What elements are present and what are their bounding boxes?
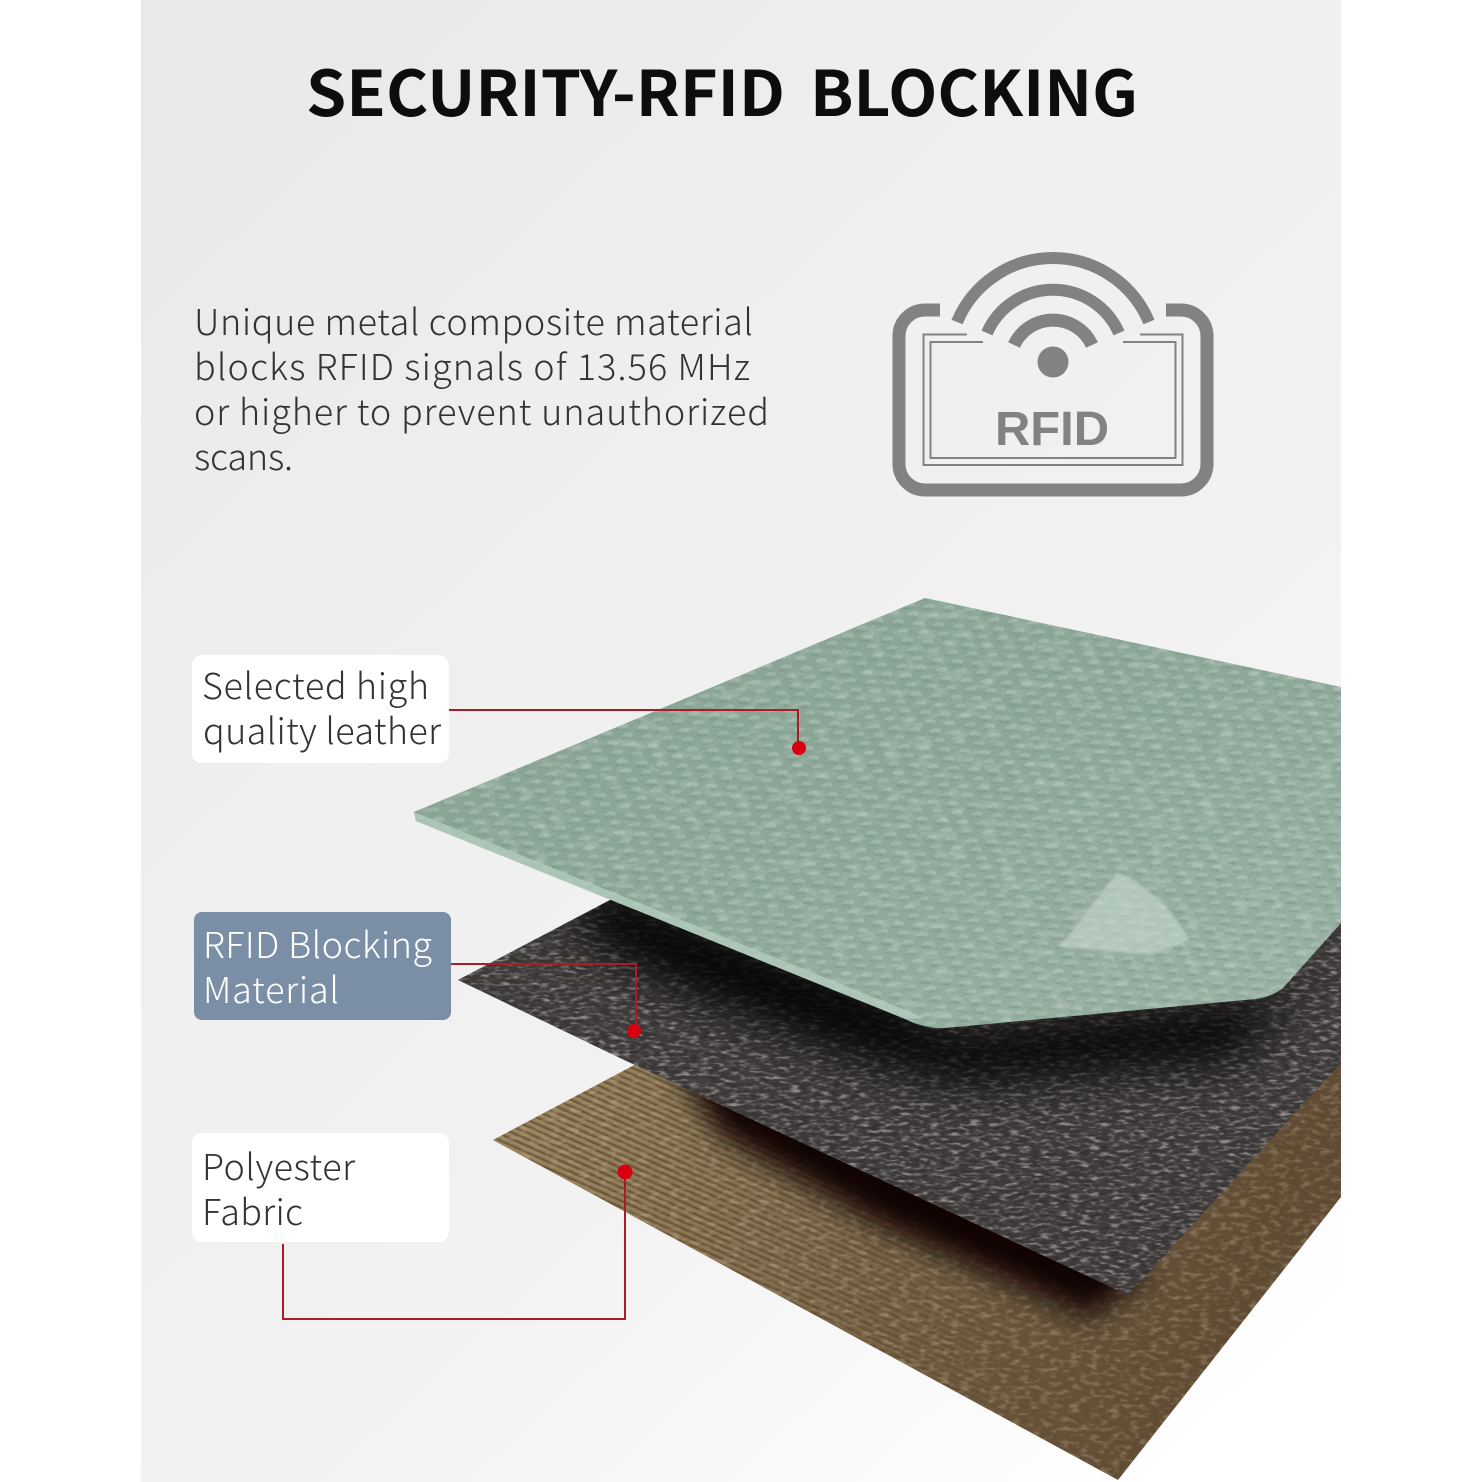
description text: [194, 294, 769, 481]
icon: RFID card with signal waves: [899, 258, 1207, 490]
label: polyester fabric: Polyester: [202, 1139, 356, 1191]
callout line: polyester: [283, 1164, 632, 1319]
label: RFID blocking material: Material: [203, 962, 339, 1014]
label: RFID blocking material: [194, 912, 451, 1020]
description text: Unique metal composite material: [194, 294, 753, 346]
label: RFID blocking material: RFID Blocking: [203, 917, 432, 969]
label: selected high quality leather: quality leather: [203, 703, 442, 755]
title: BLOCKING: [810, 44, 1138, 135]
layer: brown polyester fabric: [480, 1040, 1350, 1482]
material layers illustration: [410, 595, 1350, 1482]
label: selected high quality leather: Selected high: [202, 658, 429, 710]
label: selected high quality leather: [192, 655, 449, 763]
curled corner highlight: [1060, 872, 1190, 955]
description text: blocks RFID signals of 13.56 MHz: [194, 339, 750, 391]
layer: green leather: [410, 595, 1345, 1035]
label: polyester fabric: Fabric: [202, 1184, 303, 1236]
label: polyester fabric: [192, 1133, 449, 1242]
icon: RFID card with signal waves: RFID: [995, 403, 1109, 456]
layer: black RFID blocking material: [450, 880, 1350, 1310]
callout line: RFID material: [451, 964, 641, 1038]
description text: or higher to prevent unauthorized: [194, 384, 769, 436]
description text: scans.: [194, 429, 293, 481]
title: SECURITY-RFID: [306, 44, 785, 135]
callout line: leather: [449, 710, 806, 755]
title: [306, 44, 1138, 135]
